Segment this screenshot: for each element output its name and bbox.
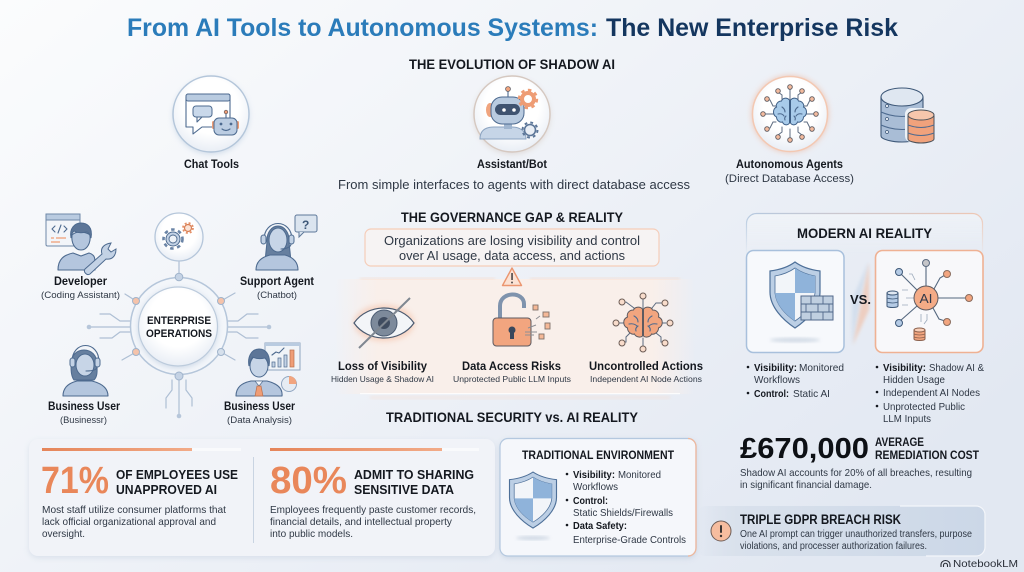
label: uncontrolled actions: Independent AI Node Actions (590, 374, 702, 384)
persona: business user: Business User (48, 401, 120, 413)
stat 80 percent: into public models. (270, 528, 353, 540)
list: traditional environment: Monitored (618, 469, 661, 481)
stat: remediation cost: REMEDIATION COST (875, 450, 979, 462)
list: AI reality column: Visibility: (883, 362, 926, 374)
panel: enterprise operations hub (41, 213, 317, 426)
panel: traditional environment (500, 438, 696, 558)
callout: losing visibility (365, 229, 659, 266)
icon: crossed eye (354, 298, 414, 348)
label: loss of visibility: Loss of Visibility (338, 359, 427, 373)
stat 71 percent: Most staff utilize consumer platforms that (42, 504, 226, 516)
list: traditional environment: Data Safety: (573, 520, 627, 532)
persona: support agent: (Chatbot) (257, 290, 297, 301)
decorative dots (87, 325, 91, 329)
callout: GDPR breach risk (697, 506, 985, 556)
list: traditional column: Workflows (754, 374, 800, 386)
list: AI reality column: LLM Inputs (883, 413, 931, 425)
callout: GDPR breach risk: One AI prompt can trigger unauthorized transfers, purpose (740, 529, 972, 540)
list: traditional environment: Workflows (573, 481, 618, 493)
persona: developer: (Coding Assistant) (41, 290, 120, 301)
stat 71 percent (41, 448, 241, 540)
stat 80 percent: 80% (270, 460, 347, 502)
stat 80 percent: financial details, and intellectual property (270, 516, 453, 528)
label: uncontrolled actions (589, 359, 703, 384)
list: traditional environment: Visibility: (573, 469, 615, 481)
icon: alert (711, 521, 731, 541)
callout: GDPR breach risk: violations, and processer authorization failures. (740, 541, 927, 552)
persona: support agent (240, 215, 317, 301)
persona: business user: (Businessr) (60, 415, 107, 426)
label: autonomous agents: (Direct Database Access) (725, 173, 854, 185)
icon: chat tools (173, 76, 249, 154)
card: AI network: AI (920, 292, 932, 306)
callout: losing visibility: Organizations are losing visibility and control (384, 234, 640, 248)
stat: remediation cost: AVERAGE (875, 437, 924, 449)
list: AI reality column: Independent AI Nodes (883, 387, 980, 399)
heading: modern AI reality: MODERN AI REALITY (797, 226, 932, 241)
icon: autonomous agents brain (752, 76, 828, 152)
stat: remediation cost: Shadow AI accounts for 20% of all breaches, resulting (740, 467, 972, 479)
panel: governance gap (331, 210, 703, 425)
persona: business user (48, 346, 120, 426)
title: From AI Tools to Autonomous Systems: (127, 14, 598, 42)
title (127, 14, 898, 42)
stat 71 percent: UNAPPROVED AI (116, 482, 217, 497)
persona: developer: Developer (54, 276, 107, 288)
caption: evolution: From simple interfaces to agents with direct database access (338, 178, 690, 192)
stat 71 percent: lack official organizational approval and (42, 516, 216, 528)
ring nodes (132, 273, 224, 380)
outer ring (130, 278, 228, 374)
stat: remediation cost: £670,000 (740, 433, 869, 465)
stat 80 percent: SENSITIVE DATA (354, 482, 455, 497)
heading: governance gap: THE GOVERNANCE GAP & REALITY (401, 210, 623, 225)
list: traditional column: Visibility: (754, 362, 797, 374)
label: chat tools: Chat Tools (184, 159, 239, 171)
label: assistant bot: Assistant/Bot (477, 159, 547, 171)
panel outline (746, 212, 984, 250)
heading: traditional vs reality: TRADITIONAL SECURITY vs. AI REALITY (386, 410, 638, 425)
label: loss of visibility: Hidden Usage & Shadow AI (331, 374, 434, 384)
list: AI reality column: Shadow AI & (929, 362, 984, 374)
stat: remediation cost (740, 433, 979, 491)
persona: business user data analysis: (Data Analysis) (227, 415, 292, 426)
list: AI reality column: Hidden Usage (883, 374, 945, 386)
hub: enterprise operations: OPERATIONS (146, 328, 212, 340)
label: vs: VS. (850, 293, 871, 307)
circuit traces (89, 261, 269, 416)
card: AI network (876, 250, 983, 352)
label: autonomous agents: Autonomous Agents (736, 159, 843, 171)
list: traditional column: Monitored (799, 362, 844, 374)
label: data access risks: Unprotected Public LLM Inputs (453, 374, 571, 384)
stat 80 percent: Employees frequently paste customer records, (270, 504, 476, 516)
list: traditional environment: Control: (573, 495, 608, 507)
panel: evolution of shadow AI (173, 57, 934, 192)
heading: traditional environment: TRADITIONAL ENVIRONMENT (522, 448, 675, 462)
list: traditional environment: Static Shields/Firewalls (573, 507, 673, 519)
risk band (335, 278, 695, 399)
list: traditional column: Static AI (793, 388, 830, 400)
stat 80 percent (270, 448, 479, 540)
icon: gears (155, 213, 203, 261)
panel: modern AI reality (746, 214, 984, 425)
callout: losing visibility: over AI usage, data access, and actions (399, 249, 625, 263)
icon: orange brain network (613, 293, 673, 352)
label: autonomous agents (725, 159, 854, 185)
divider (253, 457, 254, 543)
panel: employee statistics (29, 439, 495, 558)
label: loss of visibility (331, 359, 434, 384)
icon: assistant bot (474, 76, 550, 154)
vs divider glow (852, 262, 869, 345)
stat 71 percent: OF EMPLOYEES USE (116, 467, 238, 482)
stat 80 percent: ADMIT TO SHARING (354, 467, 474, 482)
label: uncontrolled actions: Uncontrolled Actions (589, 359, 703, 373)
list: AI reality column (876, 362, 984, 425)
card: traditional shield (746, 250, 844, 352)
persona: support agent: Support Agent (240, 276, 314, 288)
persona: developer (41, 214, 120, 301)
persona: support agent: ? (302, 218, 309, 232)
icon: warning triangle (502, 268, 522, 286)
callout: GDPR breach risk: TRIPLE GDPR BREACH RISK (740, 512, 901, 527)
list: traditional environment (566, 469, 686, 546)
card background (29, 441, 495, 558)
persona: business user data analysis: Business User (224, 401, 295, 413)
heading: evolution: THE EVOLUTION OF SHADOW AI (409, 57, 615, 72)
list: AI reality column: Unprotected Public (883, 401, 965, 413)
list: traditional column (747, 362, 844, 400)
icon: shield (510, 472, 556, 540)
watermark: NotebookLM: NotebookLM (953, 558, 1018, 570)
icon: database (881, 88, 934, 143)
icon: open lock with data (493, 294, 550, 346)
persona: business user data analysis (224, 343, 300, 426)
stat 71 percent: 71% (41, 460, 109, 502)
label: data access risks: Data Access Risks (462, 359, 561, 373)
list: traditional column: Control: (754, 388, 789, 400)
stat: remediation cost: in significant financial damage. (740, 479, 872, 491)
title: The New Enterprise Risk (606, 14, 898, 42)
hub: enterprise operations (138, 287, 218, 368)
stat 71 percent: oversight. (42, 528, 85, 540)
hub: enterprise operations: ENTERPRISE (147, 315, 211, 327)
label: data access risks (453, 359, 571, 384)
list: traditional environment: Enterprise-Grade Controls (573, 534, 686, 546)
